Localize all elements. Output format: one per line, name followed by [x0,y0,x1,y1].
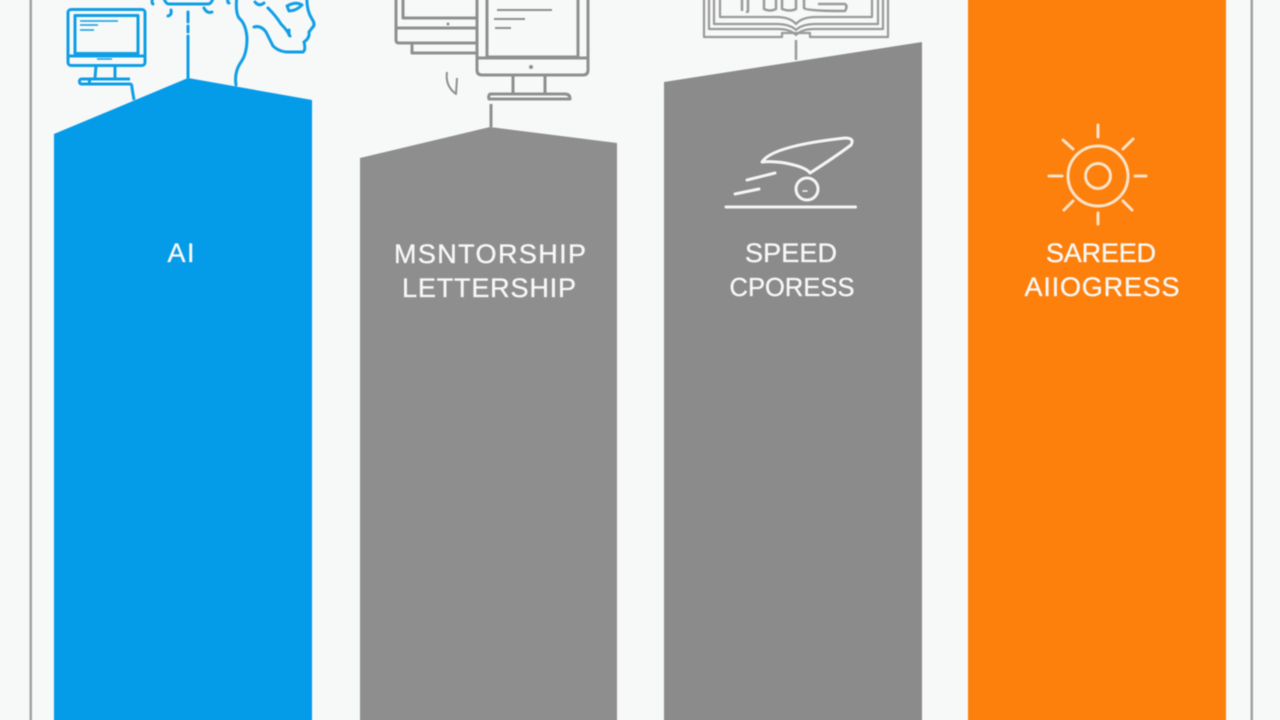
label: mentorship: LETTERSHIP [402,273,576,303]
icon: open book [704,0,888,60]
icon: two monitors [396,0,588,127]
label: shared progress: AIIOGRESS [1024,272,1180,302]
icon: speed feather [726,138,856,207]
label: mentorship [394,239,586,303]
column shape: speed [664,42,922,720]
label: speed: SPEED [745,238,837,268]
label: shared progress [1024,238,1180,302]
label: shared progress: SAREED [1046,238,1156,268]
panel: AI column [54,0,314,720]
label: mentorship: MSNTORSHIP [394,239,586,269]
panel: Mentorship column [360,0,617,720]
icon: computer [68,10,145,100]
icon: network hub [152,0,229,78]
column shape: mentorship [360,127,617,720]
label: speed: CPORESS [730,274,854,302]
panel: Shared progress column [968,0,1226,720]
icon: human head [236,0,314,85]
column shape: shared progress [968,0,1226,720]
panel: Speed column [664,0,922,720]
label: AI: AI [168,238,194,268]
label: speed [730,238,854,302]
column shape: AI [54,78,312,720]
icon: sun [1049,125,1146,224]
